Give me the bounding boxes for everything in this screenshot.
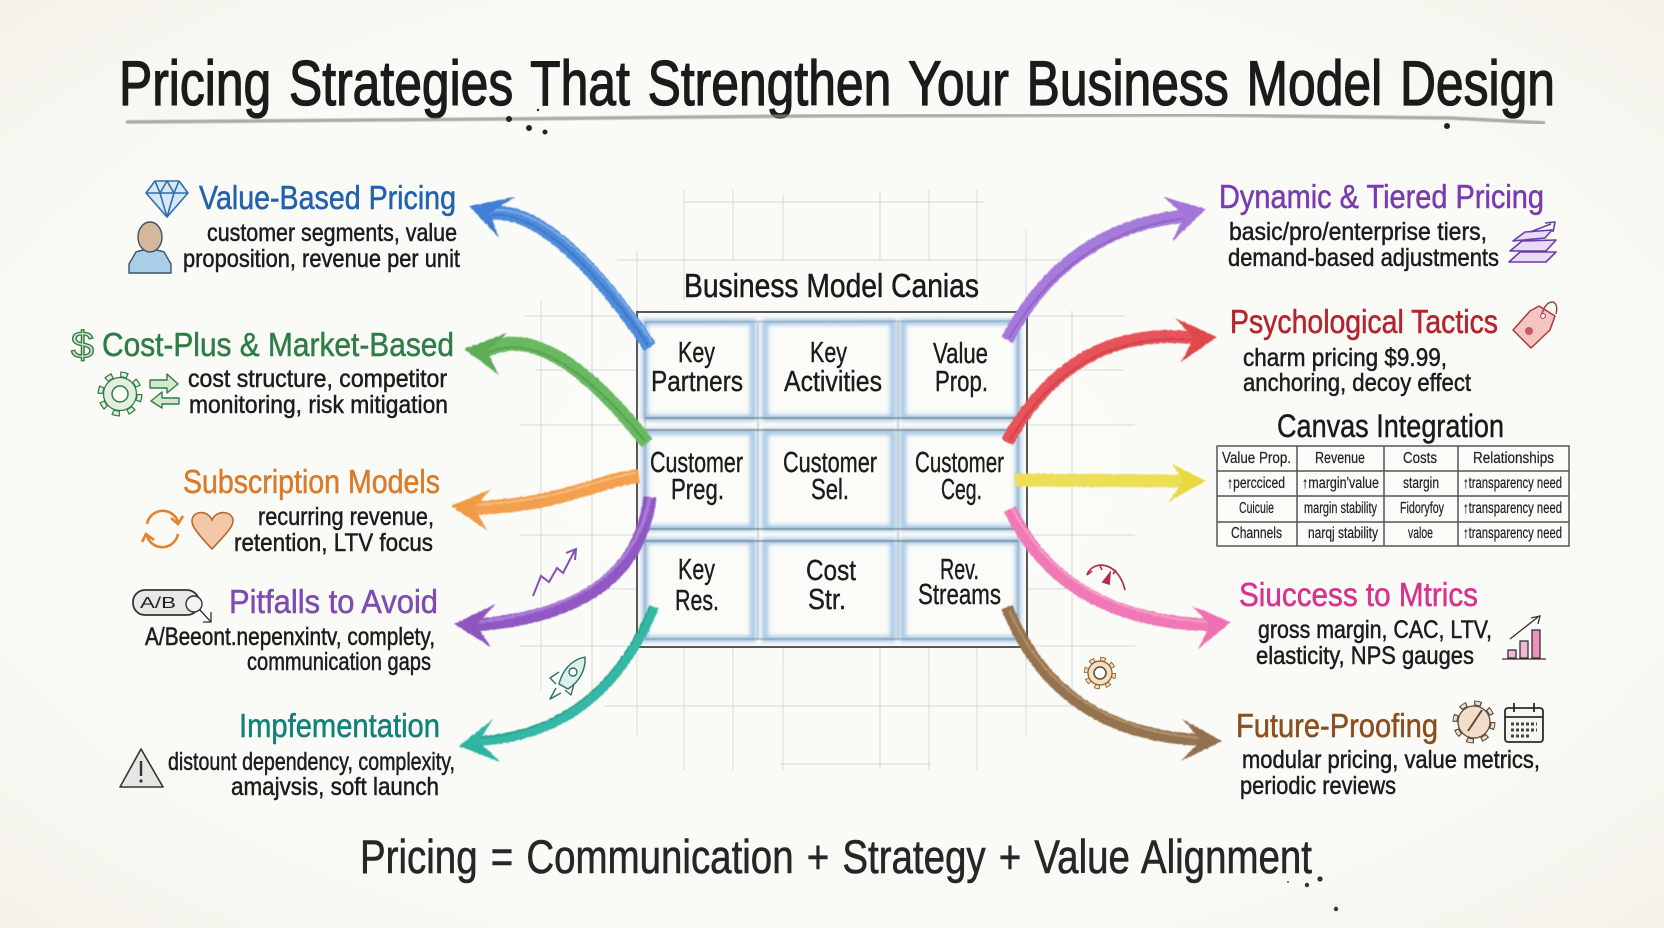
body: implementation: amajvsis, soft launch (231, 773, 439, 801)
body: cost-plus: cost structure, competitor (188, 365, 447, 393)
arrow: brown to future-proofing (1007, 607, 1222, 761)
cell: key partners: Partners (651, 366, 743, 398)
panel: canvas integration (1217, 408, 1569, 546)
cell: rev streams: Rev. (940, 554, 979, 586)
heading: cost-plus: Cost-Plus & Market-Based (102, 326, 454, 363)
icon: dollar: $ (71, 325, 94, 367)
arrow: red to psychological tactics (1007, 318, 1217, 442)
cell: value prop (933, 338, 988, 398)
arrow: yellow to canvas integration (1015, 464, 1206, 502)
icon: sync arrows (142, 511, 183, 547)
icon: gear with dial (1455, 703, 1493, 741)
background sketch grid (520, 190, 1135, 770)
body: success metrics: elasticity, NPS gauges (1256, 642, 1474, 670)
body: dynamic and tiered pricing: demand-based adjustments (1228, 244, 1499, 272)
icon: diamond (146, 181, 188, 217)
heading: future-proofing: Future-Proofing (1236, 707, 1438, 744)
body: subscription models (234, 503, 434, 557)
integration table: ↑margin'value (1302, 475, 1379, 492)
body: value-based pricing (183, 219, 460, 273)
arrow: teal to implementation (459, 607, 654, 762)
body: dynamic and tiered pricing (1228, 218, 1499, 272)
icon: heart (192, 513, 233, 549)
heading: dynamic and tiered pricing: Dynamic & Tiered Pricing (1219, 178, 1544, 215)
body: subscription models: recurring revenue, (258, 503, 434, 531)
cell: customer sel: Customer (783, 447, 877, 479)
body: future-proofing (1240, 746, 1540, 800)
heading: value-based pricing: Value-Based Pricing (199, 179, 456, 216)
body: pitfalls to avoid: A/Beeont.nepenxintv, complety, (145, 623, 435, 651)
canvas heading: Business Model Canias (684, 267, 979, 304)
arrow: purple to dynamic pricing (1007, 197, 1206, 340)
icon: rocket (550, 657, 585, 699)
cell: rev streams: Streams (918, 579, 1001, 611)
integration table: Cuicuie (1239, 500, 1274, 517)
footer tagline (360, 830, 1338, 911)
body: psychological tactics (1243, 344, 1471, 397)
body: pitfalls to avoid: communication gaps (247, 648, 431, 676)
icon: a/b test pill (133, 590, 211, 622)
integration table: margin stability (1304, 500, 1377, 517)
cell: cost str (806, 555, 856, 616)
panel: subscription models (142, 463, 440, 557)
body: cost-plus (188, 365, 448, 419)
icon: price tag (1513, 302, 1557, 348)
icon: tier layers (1509, 222, 1556, 262)
panel: future-proofing (1086, 659, 1543, 800)
icon: gauge (1087, 565, 1125, 590)
body: psychological tactics: anchoring, decoy effect (1243, 369, 1471, 397)
integration table: Relationships (1473, 450, 1554, 467)
cell: key res: Key (678, 554, 715, 586)
heading: pitfalls to avoid: Pitfalls to Avoid (229, 583, 438, 620)
panel: business model canvas (637, 267, 1027, 647)
heading: subscription models: Subscription Models (183, 463, 440, 500)
integration table (1217, 446, 1569, 546)
body: dynamic and tiered pricing: basic/pro/enterprise tiers, (1229, 218, 1487, 246)
body: success metrics: gross margin, CAC, LTV, (1258, 616, 1492, 644)
integration table: narqj stability (1308, 525, 1378, 542)
integration table: Revenue (1315, 450, 1365, 467)
cell: rev streams (918, 554, 1001, 611)
body: implementation: distount dependency, complexity, (168, 748, 455, 776)
cell: customer seg: Ceg. (941, 474, 982, 506)
panel: cost-plus and market-based (71, 325, 454, 419)
cell: customer preg (650, 447, 743, 506)
icon: a/b test pill: A/B (140, 595, 176, 612)
cell: customer sel (783, 447, 877, 506)
cell: key res (675, 554, 719, 617)
body: psychological tactics: charm pricing $9.99, (1243, 344, 1447, 372)
icon: rising bar chart (1502, 616, 1546, 659)
icon: warning triangle (120, 749, 163, 787)
body: cost-plus: monitoring, risk mitigation (189, 391, 448, 419)
body: pitfalls to avoid (145, 623, 435, 676)
body: value-based pricing: customer segments, value (207, 219, 457, 247)
integration table: Channels (1231, 525, 1282, 542)
canvas frame and cells (637, 312, 1027, 647)
body: value-based pricing: proposition, revenue per unit (183, 245, 460, 273)
icon: gear (100, 374, 140, 414)
arrow: orange to subscription (451, 473, 639, 531)
cell: key res: Res. (675, 585, 719, 617)
heading: success metrics: Siuccess to Mtrics (1239, 576, 1478, 613)
icon: person (129, 222, 171, 273)
icon: zigzag arrow (533, 549, 576, 596)
arrow: green to cost-plus (464, 333, 647, 443)
panel: implementation (120, 657, 585, 801)
cell: key activities: Activities (784, 366, 882, 398)
cell: customer seg (915, 447, 1004, 506)
cell: key partners (651, 337, 743, 398)
cell: customer preg: Customer (650, 447, 743, 479)
cell: key activities: Key (810, 337, 847, 369)
integration table: Costs (1403, 450, 1437, 467)
cell: cost str: Cost (806, 555, 856, 587)
cell: customer seg: Customer (915, 447, 1004, 479)
panel: dynamic and tiered pricing (1219, 178, 1556, 272)
cell: customer sel: Sel. (811, 474, 849, 506)
body: future-proofing: modular pricing, value metrics, (1242, 746, 1540, 774)
integration table: ↑percciced (1227, 475, 1285, 492)
body: subscription models: retention, LTV focus (234, 529, 433, 557)
panel: pitfalls to avoid (133, 549, 576, 676)
cell: key partners: Key (678, 337, 715, 369)
footer tagline: Pricing = Communication + Strategy + Value Alignment (360, 830, 1312, 883)
arrow: blue to value-based pricing (469, 197, 652, 347)
integration table: Value Prop. (1222, 450, 1291, 467)
icon: calendar (1505, 703, 1543, 742)
heading: psychological tactics: Psychological Tactics (1230, 303, 1498, 340)
panel: psychological tactics (1230, 302, 1557, 397)
integration table: stargin (1403, 475, 1439, 492)
icon: exchange arrows (150, 374, 179, 408)
arrow: purple to pitfalls (454, 497, 650, 647)
integration table: valoe (1408, 525, 1433, 542)
panel: success metrics (1087, 565, 1546, 670)
cell: value prop: Prop. (935, 366, 988, 398)
integration table: Fidoryfoy (1400, 500, 1444, 517)
integration table: ↑transparency need (1463, 500, 1562, 517)
icon: small brown gear (1086, 659, 1114, 687)
arrow: pink to success metrics (1010, 509, 1231, 649)
body: implementation (168, 748, 455, 801)
cell: customer preg: Preg. (671, 474, 724, 506)
body: future-proofing: periodic reviews (1240, 772, 1396, 800)
canvas integration heading: Canvas Integration (1277, 408, 1504, 444)
heading: implementation: Impfementation (239, 707, 440, 744)
cell: cost str: Str. (808, 584, 846, 616)
integration table: ↑transparency need (1463, 525, 1562, 542)
integration table: ↑transparency need (1463, 475, 1562, 492)
cell: key activities (784, 337, 882, 398)
panel: value-based pricing (129, 179, 460, 273)
body: success metrics (1256, 616, 1492, 670)
cell: value prop: Value (933, 338, 988, 370)
